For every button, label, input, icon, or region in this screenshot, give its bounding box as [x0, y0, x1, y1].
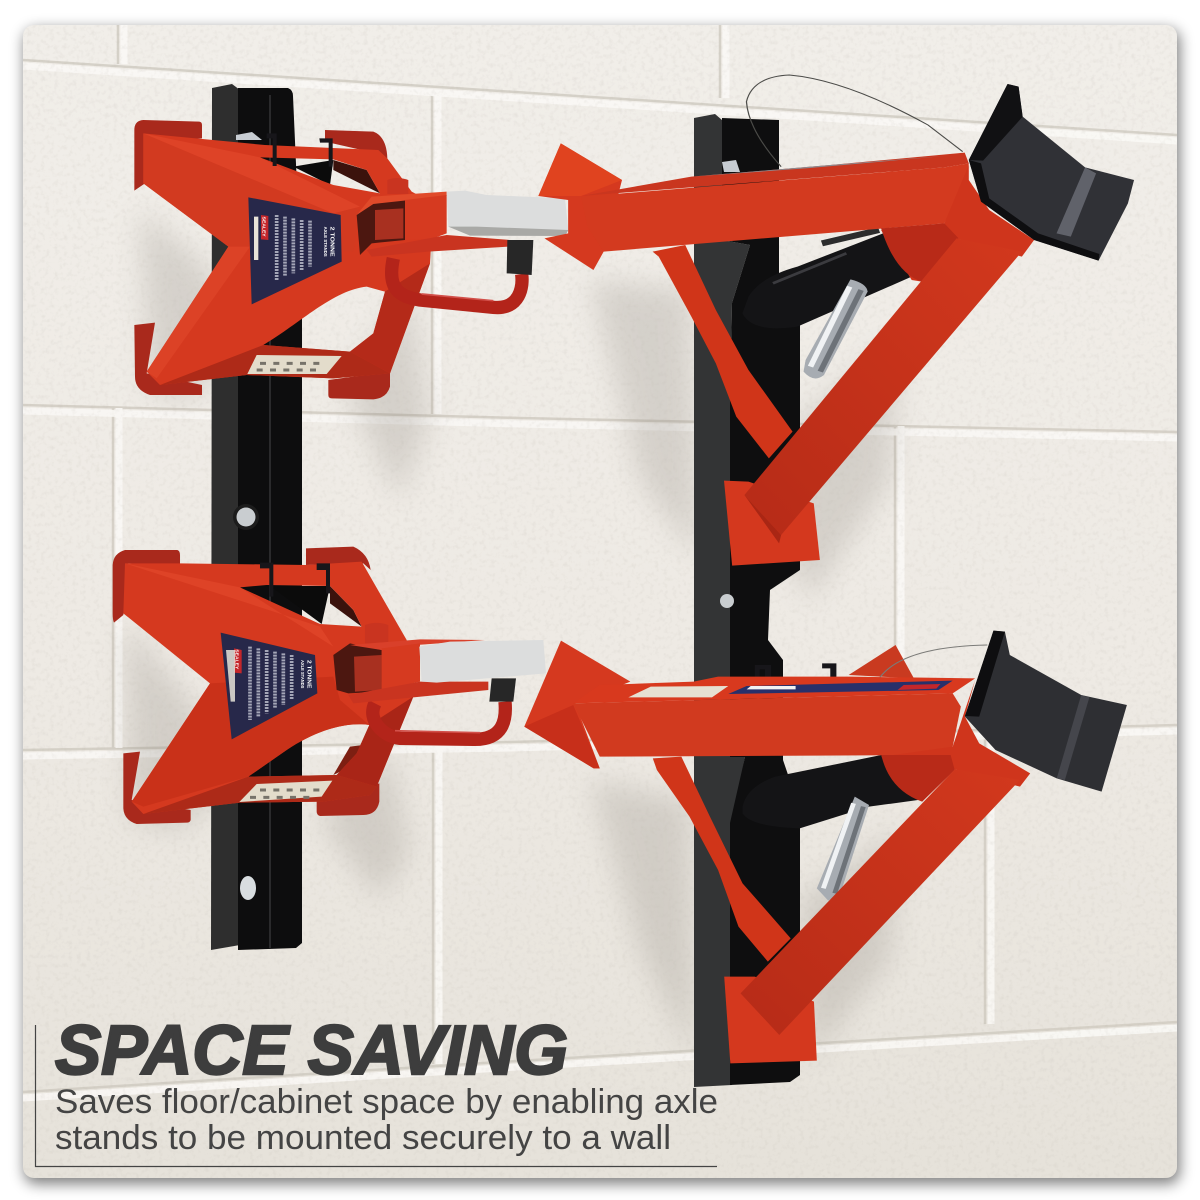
long arm: [741, 769, 1020, 1035]
saddle: [969, 84, 1134, 261]
axle stand: top left: AXLE STANDS: [323, 227, 328, 257]
description: stands to be mounted securely to a wall: [55, 1119, 671, 1157]
strut: [653, 245, 793, 458]
wall rail: left: [211, 84, 302, 950]
top beam: [581, 153, 969, 252]
axle stand: bottom right: [524, 631, 1127, 1063]
base plate: beam end: [524, 641, 630, 768]
saddle: [965, 631, 1127, 792]
rear base plate: [849, 645, 914, 678]
neck and cylinder: [881, 680, 1030, 802]
long arm: [744, 238, 1022, 543]
axle stand: bottom left: [113, 547, 546, 824]
axle stand: bottom left: 2 TONNE: [305, 660, 311, 689]
axle stand: bottom left: AXLE STANDS: [300, 660, 305, 688]
axle stand: top left: [134, 120, 568, 399]
top beam with labels: [573, 677, 975, 757]
description: Saves floor/cabinet space by enabling axle: [55, 1083, 718, 1121]
hooks: [755, 663, 836, 681]
axle stand: top left: 2 TONNE: [329, 227, 335, 257]
axle stand: top right: [538, 75, 1134, 566]
axle stand: top left: SEALEY: [261, 217, 267, 237]
wall rail: right: [694, 114, 800, 1087]
black handle: [743, 755, 918, 828]
locking wire: [879, 645, 987, 678]
black handle: [742, 230, 912, 328]
pin: [817, 797, 869, 901]
locking wire: [746, 75, 963, 167]
axle stand: bottom left: SEALEY: [234, 649, 240, 670]
heading: SPACE SAVING: [55, 1011, 568, 1089]
neck and cylinder: [881, 165, 1034, 282]
description: [55, 1083, 718, 1157]
foot plate: [724, 977, 817, 1063]
foot plate: [724, 481, 820, 566]
base plate: beam end: [538, 143, 622, 270]
strut: [653, 757, 791, 962]
pin: [804, 279, 868, 378]
text frame: [36, 1025, 717, 1166]
